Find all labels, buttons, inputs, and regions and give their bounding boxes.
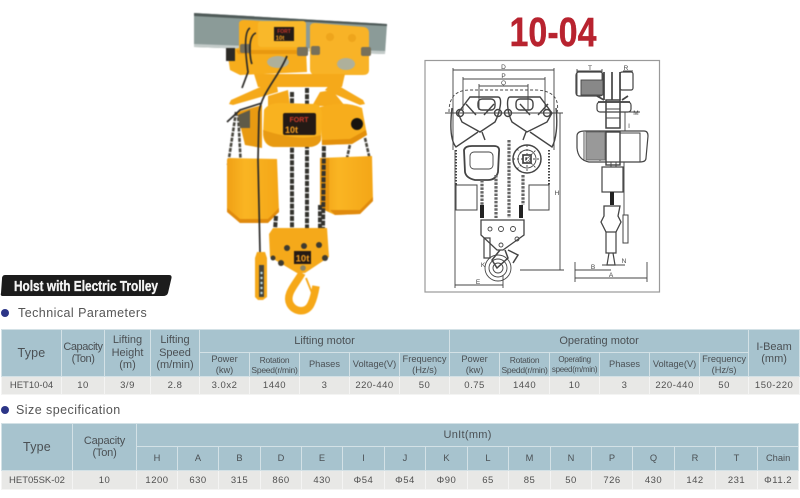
table: technical parameters: 50 <box>718 380 730 391</box>
trolley side <box>597 72 630 102</box>
table: technical parameters: Capacity <box>63 340 103 352</box>
table: size specification: 1200 <box>145 474 169 486</box>
heading: technical parameters: Technical Parameters <box>18 306 147 320</box>
table: size specification: E <box>319 453 325 463</box>
table: size specification: 430 <box>313 474 331 486</box>
table: size specification: 860 <box>272 474 290 486</box>
table: size specification: M <box>526 453 533 463</box>
side view labels: B <box>591 264 595 271</box>
table: size specification: P <box>609 453 615 463</box>
table: technical parameters: 3.0x2 <box>212 380 237 391</box>
bag and chain <box>611 162 624 215</box>
table: technical parameters: Lifting <box>113 334 142 346</box>
table: technical parameters: (m) <box>119 359 136 371</box>
hook block side <box>601 206 621 232</box>
right trolley <box>310 23 371 75</box>
front view drawing <box>445 68 564 288</box>
table: size specification <box>1 423 799 490</box>
table: technical parameters: Phases <box>309 359 340 369</box>
table: technical parameters: Voltage(V) <box>653 359 696 369</box>
table: technical parameters: Lifting motor <box>294 335 355 347</box>
left trolley: 10t <box>276 36 284 42</box>
table: technical parameters: (Hz/s) <box>412 364 437 374</box>
table: technical parameters: Height <box>112 347 143 359</box>
table: size specification: B <box>236 453 243 463</box>
motors <box>576 72 603 96</box>
table: technical parameters: 220-440 <box>655 380 694 391</box>
table: size specification: Type <box>23 440 51 454</box>
table: technical parameters: speed(m/min) <box>552 364 597 374</box>
dimension labels: K <box>481 262 486 269</box>
table: size specification: H <box>154 453 160 463</box>
table: technical parameters: (kw) <box>216 364 233 374</box>
hook <box>289 273 316 311</box>
table: technical parameters: Operating motor <box>559 335 639 347</box>
table: size specification: 85 <box>524 474 535 486</box>
side view labels: T <box>588 65 592 72</box>
side view labels: M <box>633 110 639 117</box>
table: technical parameters: (mm) <box>761 353 787 365</box>
table: technical parameters: (Hz/s) <box>712 364 736 374</box>
table: technical parameters: Rotation <box>510 354 539 364</box>
heading: size specification: Size specification <box>16 403 121 417</box>
motor right <box>513 145 541 173</box>
table: size specification: L <box>485 453 491 463</box>
table: size specification: 231 <box>728 474 745 486</box>
side view labels: A <box>609 272 614 279</box>
dimension labels: Q <box>501 80 506 87</box>
table: size specification: 142 <box>686 474 704 486</box>
hook block: 10t <box>296 254 310 264</box>
gearbox left <box>464 146 499 180</box>
I-beam <box>194 13 387 54</box>
motor body <box>577 131 648 162</box>
table: technical parameters: 50 <box>419 380 430 391</box>
pendant control <box>255 252 267 300</box>
table: technical parameters: 220-440 <box>355 380 394 391</box>
dimension labels: D <box>501 64 506 71</box>
right chain bag <box>320 156 373 215</box>
table: technical parameters: 1440 <box>263 380 286 391</box>
dimension lines <box>453 68 554 150</box>
table: size specification: HET05SK-02 <box>9 474 65 486</box>
load chains <box>275 88 324 230</box>
table: size specification: Q <box>650 453 657 463</box>
table: technical parameters: Operating <box>558 355 591 364</box>
table: size specification: N <box>568 453 574 463</box>
side view labels: N <box>622 258 627 265</box>
dimension labels: E <box>476 279 481 286</box>
table: technical parameters: 10 <box>569 380 580 391</box>
table: technical parameters: Frequency <box>702 354 746 364</box>
table: technical parameters: Voltage(V) <box>353 359 396 369</box>
table: technical parameters: Phases <box>609 359 640 369</box>
dimension labels <box>476 64 560 286</box>
bags <box>456 185 549 210</box>
table: size specification: 630 <box>189 474 207 486</box>
control cables <box>227 28 287 252</box>
table: size specification: 726 <box>603 474 621 486</box>
hook block <box>269 228 329 273</box>
table: size specification: (Ton) <box>92 447 117 459</box>
table: technical parameters: I-Beam <box>756 340 792 352</box>
table: technical parameters: Frequency <box>403 354 446 364</box>
table: size specification: Φ90 <box>437 474 456 486</box>
side view labels: I <box>628 123 630 130</box>
left chain bag <box>227 158 279 223</box>
table: size specification: Φ54 <box>354 474 373 486</box>
table: technical parameters: Speed(r/min) <box>251 364 298 374</box>
table: technical parameters: Rotation <box>260 354 289 364</box>
side view labels <box>588 65 639 279</box>
table: technical parameters: Spedd(r/min) <box>501 364 548 374</box>
table: technical parameters: Power <box>211 354 238 364</box>
hook <box>485 255 511 281</box>
hoist body <box>237 103 367 148</box>
table: technical parameters: Lifting <box>160 334 190 346</box>
hook block <box>481 220 524 250</box>
table: technical parameters: Type <box>18 346 45 360</box>
product photo: electric chain hoist with trolley <box>193 12 388 316</box>
left trolley <box>226 20 308 75</box>
table: technical parameters <box>1 329 800 395</box>
table: technical parameters: 0.75 <box>464 380 485 391</box>
table: size specification: 10 <box>99 474 110 486</box>
hoist body: 10t <box>285 125 298 135</box>
table: technical parameters: (Ton) <box>72 353 94 365</box>
hoist body: FORT <box>289 117 309 124</box>
table: size specification: 65 <box>482 474 494 486</box>
table: technical parameters: (m/min) <box>156 359 194 371</box>
chains <box>482 140 523 218</box>
table: size specification: Chain <box>766 453 790 463</box>
table: size specification: 50 <box>565 474 577 486</box>
table: technical parameters: 1440 <box>513 380 536 391</box>
table: size specification: A <box>195 453 201 463</box>
bag suspension chains <box>228 112 370 168</box>
trolley wheels and frames <box>451 97 557 147</box>
table: technical parameters: (kw) <box>466 364 483 374</box>
table: size specification: Φ11.2 <box>764 474 792 486</box>
table: technical parameters: 2.8 <box>168 380 182 391</box>
suspension yoke <box>229 74 365 106</box>
dimension labels: H <box>555 190 560 197</box>
side view labels: R <box>624 65 629 72</box>
table: technical parameters: 3 <box>322 380 327 391</box>
table: size specification: K <box>443 453 450 463</box>
table: technical parameters: 150-220 <box>755 380 793 391</box>
table: technical parameters: 3/9 <box>120 380 135 391</box>
table: size specification: UnIt(mm) <box>444 429 492 441</box>
table: technical parameters: Power <box>461 354 488 364</box>
table: technical parameters: 10 <box>77 380 89 391</box>
table: size specification: 315 <box>231 474 248 486</box>
dimension labels: P <box>501 73 506 80</box>
technical drawing panel <box>424 60 660 293</box>
pendant side <box>623 215 628 243</box>
table: size specification: Φ54 <box>395 474 415 486</box>
table: size specification: T <box>734 453 739 463</box>
table: technical parameters: HET10-04 <box>10 380 53 391</box>
table: size specification: R <box>692 453 698 463</box>
left trolley: FORT <box>277 29 291 35</box>
table: size specification: Capacity <box>84 434 125 446</box>
table: size specification: I <box>362 453 365 463</box>
table: size specification: D <box>278 453 284 463</box>
table: technical parameters: 3 <box>622 380 627 391</box>
side view drawing <box>575 69 648 282</box>
table: size specification: 430 <box>645 474 662 486</box>
table: technical parameters: Speed <box>159 347 191 359</box>
table: size specification: J <box>403 453 407 463</box>
